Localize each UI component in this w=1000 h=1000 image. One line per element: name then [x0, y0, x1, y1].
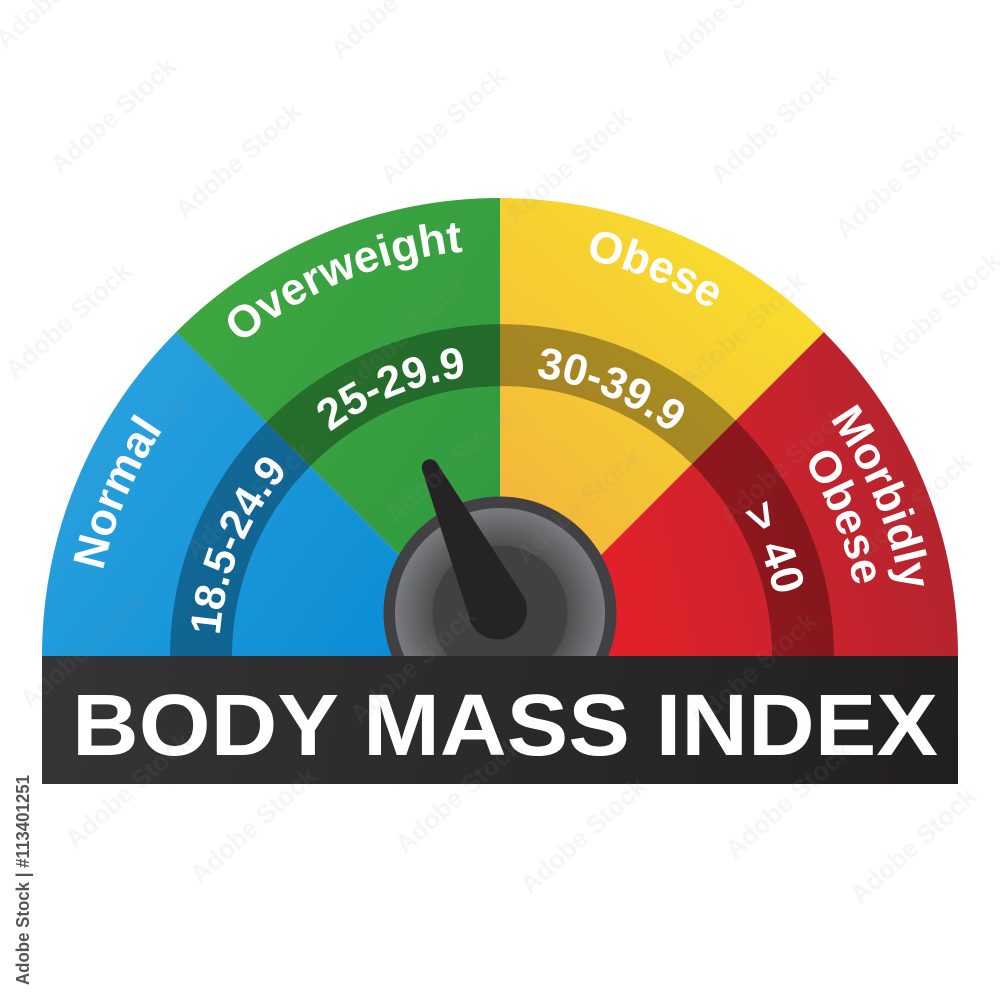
watermark: Adobe Stock: [844, 780, 983, 909]
value: 25-29.9: 25-29.9: [317, 348, 463, 432]
watermark: Adobe Stock: [179, 435, 318, 564]
segment: obese (yellow): [500, 198, 824, 656]
watermark: Adobe Stock: [704, 60, 843, 189]
watermark: Adobe Stock: [839, 445, 978, 574]
watermark: Adobe Stock: [0, 255, 138, 384]
watermark: Adobe Stock: [344, 600, 483, 729]
segment: morbidly obese (red): [500, 332, 958, 656]
value: > 40: > 40: [745, 500, 804, 592]
watermark: Adobe Stock: [169, 95, 308, 224]
hub gradient ring: [395, 508, 605, 656]
label: Obese: Obese: [590, 232, 719, 306]
watermark: Adobe Stock: [684, 605, 823, 734]
hub centre: [432, 546, 568, 656]
category labels: [73, 223, 927, 639]
gauge segments: [42, 198, 958, 656]
stock id caption: Adobe Stock | #113401251: [13, 775, 33, 985]
watermark: Adobe Stock: [514, 770, 653, 899]
watermark: Adobe Stock: [389, 730, 528, 859]
range values: [191, 348, 804, 639]
watermark: Adobe Stock: [499, 100, 638, 229]
label: Overweight: Overweight: [228, 223, 463, 338]
watermark: Adobe Stock: [334, 270, 473, 399]
watermark: Adobe Stock: [829, 115, 968, 244]
watermark: Adobe Stock: [674, 265, 813, 394]
watermark: Adobe Stock: [59, 725, 198, 854]
watermark: Adobe Stock: [379, 400, 518, 529]
title text: BODY MASS INDEX: [72, 677, 938, 774]
title bar: [42, 656, 958, 784]
watermark: Adobe Stock: [719, 735, 858, 864]
watermark: Adobe Stock: [44, 50, 183, 179]
segment: overweight (green): [176, 198, 500, 656]
hub outer ring: [384, 496, 616, 656]
watermark: Adobe Stock: [374, 60, 513, 189]
watermark: Adobe Stock: [509, 440, 648, 569]
watermark: Adobe Stock: [54, 390, 193, 519]
label: Normal: Normal: [73, 414, 162, 568]
value: 30-39.9: 30-39.9: [538, 348, 684, 428]
label: Morbidly: Morbidly: [832, 404, 927, 586]
watermark: Adobe Stock: [714, 400, 853, 529]
segment: normal (blue): [42, 332, 500, 656]
dark range band: [170, 324, 834, 656]
needle: [422, 459, 527, 640]
value: 18.5-24.9: 18.5-24.9: [191, 457, 284, 633]
gauge hub: [384, 496, 616, 656]
watermark: Adobe Stock: [14, 585, 153, 714]
watermark: Adobe Stock: [184, 760, 323, 889]
label: Obese (second line): Obese: [809, 450, 876, 584]
